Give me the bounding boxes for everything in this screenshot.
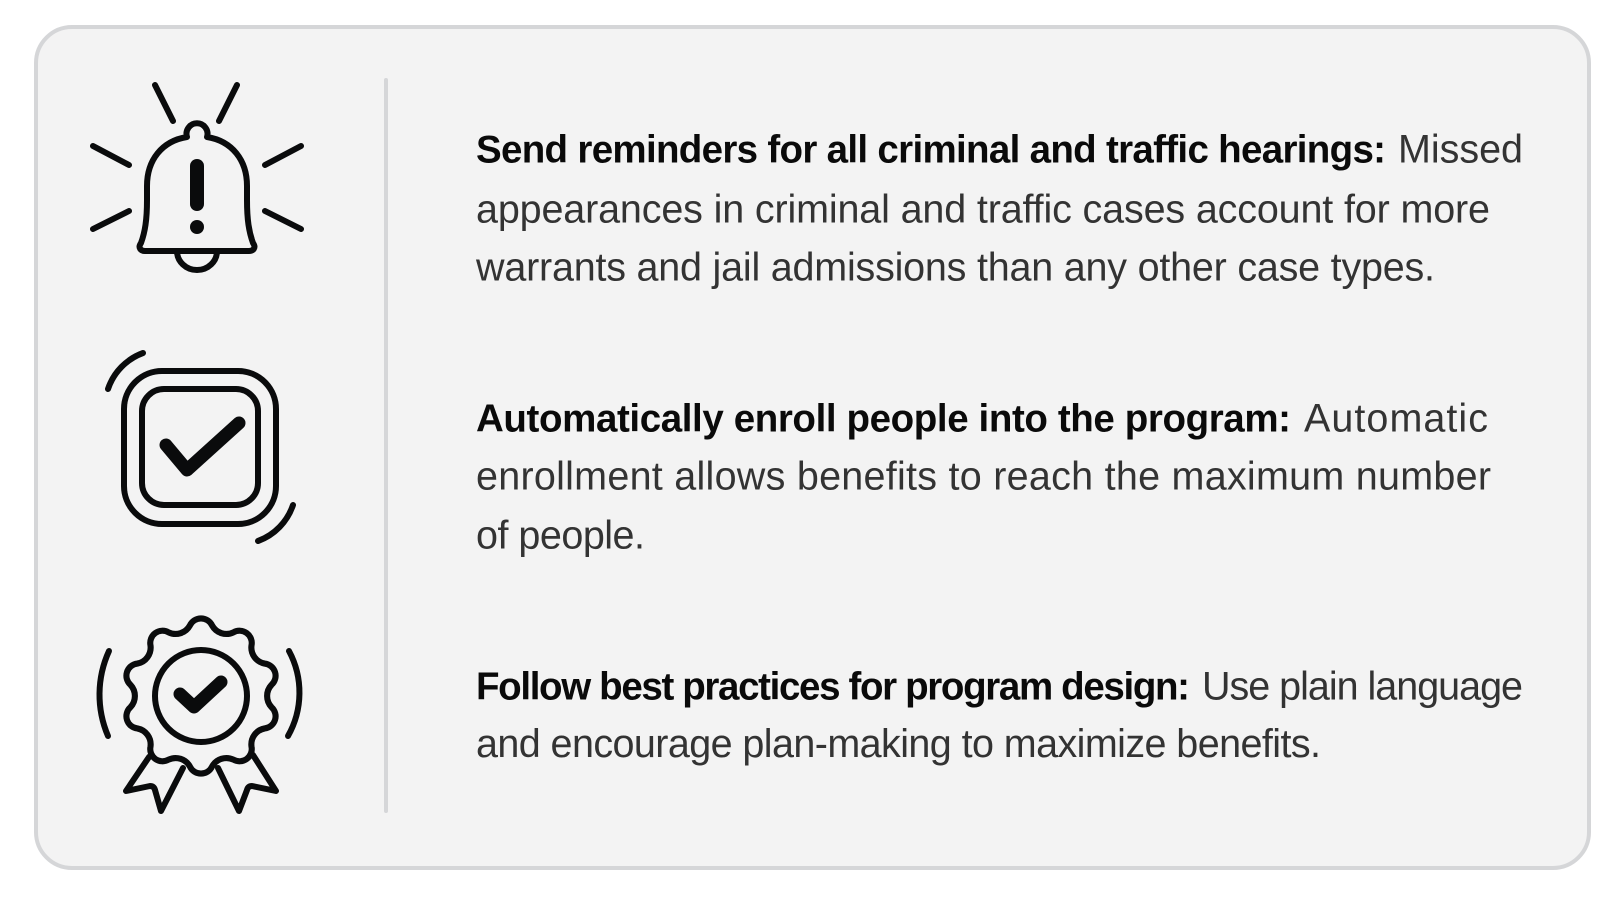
text block: best practices — [476, 664, 1523, 766]
text block: automatic enrollment: enrollment allows benefits to reach the maximum number — [476, 454, 1491, 498]
vertical divider — [384, 78, 388, 813]
icon: alert bell — [93, 85, 301, 270]
text block: send reminders: appearances in criminal and traffic cases account for more — [476, 188, 1490, 232]
text block: best practices: Use plain language — [1202, 664, 1523, 708]
icon: checkbox — [108, 353, 293, 541]
text block: send reminders: Missed — [1398, 128, 1523, 172]
text block: send reminders — [475, 128, 1523, 290]
text block: automatic enrollment: Automatic — [1304, 396, 1488, 440]
icon: award ribbon badge — [100, 618, 299, 811]
text block: automatic enrollment: of people. — [476, 514, 645, 558]
text block: automatic enrollment — [476, 396, 1491, 558]
text block: best practices: and encourage plan-making to maximize benefits. — [476, 722, 1321, 766]
text block: send reminders: warrants and jail admissions than any other case types. — [475, 246, 1435, 290]
text block: send reminders: Send reminders for all criminal and traffic hearings: — [476, 128, 1386, 172]
text block: best practices: Follow best practices for program design: — [476, 666, 1190, 708]
text block: automatic enrollment: Automatically enroll people into the program: — [476, 398, 1291, 440]
